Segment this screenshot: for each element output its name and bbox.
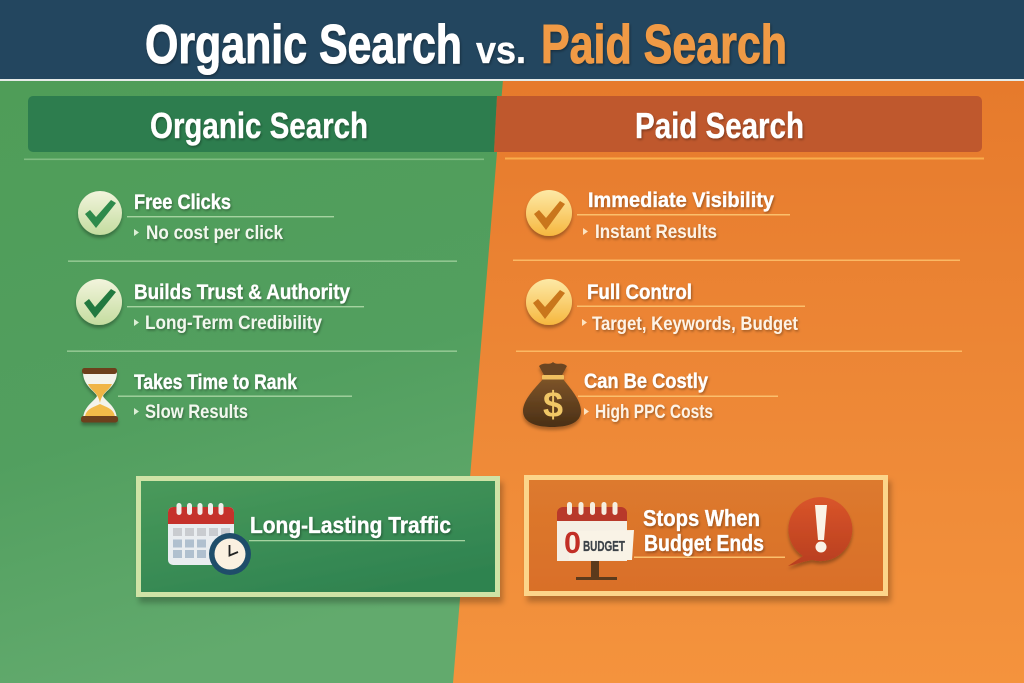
paid row: full control: Full Control [587,281,692,304]
paid row: immediate visibility: Immediate Visibility [588,189,774,212]
heading: paid search: Paid Search [635,105,804,146]
paid row: immediate visibility: Instant Results [595,222,717,243]
icon: calendar with clock [168,503,251,575]
panel: column header organic [28,96,497,152]
heading: organic search: Organic Search [150,105,368,146]
icon: check [76,279,122,325]
panel: paid background [453,80,1024,683]
icon: zero budget calendar sign: BUDGET [583,538,625,555]
title: Paid Search [541,13,787,75]
organic row: free clicks [78,191,334,244]
organic row: free clicks: No cost per click [146,223,283,244]
callout: long-lasting traffic [138,478,498,594]
callout: stops when budget ends [526,478,886,594]
icon: hourglass [81,368,118,422]
icon: money bag [523,362,581,427]
paid row: full control: Target, Keywords, Budget [592,314,799,335]
organic row: takes time [81,368,352,423]
organic row: builds trust: Long-Term Credibility [145,313,322,334]
paid row: full control [526,279,805,335]
callout: long-lasting traffic: Long-Lasting Traffic [250,512,451,538]
paid row: can be costly: Can Be Costly [584,370,708,393]
title: Organic Search [145,13,462,75]
icon: alert speech bubble [788,497,852,566]
icon: zero budget calendar sign [557,502,634,580]
callout: stops when budget ends: Budget Ends [644,530,764,556]
panel: organic background [0,80,510,683]
title: vs. [476,30,526,72]
organic row: builds trust: Builds Trust & Authority [134,281,350,304]
organic row: takes time: Takes Time to Rank [134,371,297,394]
icon: money bag: $ [543,384,563,425]
paid row: can be costly: High PPC Costs [595,402,713,423]
icon: check [526,279,572,325]
title [145,13,787,75]
organic row: free clicks: Free Clicks [134,191,231,214]
header band [0,0,1024,81]
icon: zero budget calendar sign: 0 [564,525,581,560]
paid row: immediate visibility [526,189,790,243]
panel: column header paid [494,96,982,152]
paid row: can be costly [523,362,778,427]
icon: check [78,191,122,235]
callout: stops when budget ends: Stops When [643,505,760,531]
organic row: builds trust [76,279,364,334]
icon: check [526,190,572,236]
organic row: takes time: Slow Results [145,402,248,423]
